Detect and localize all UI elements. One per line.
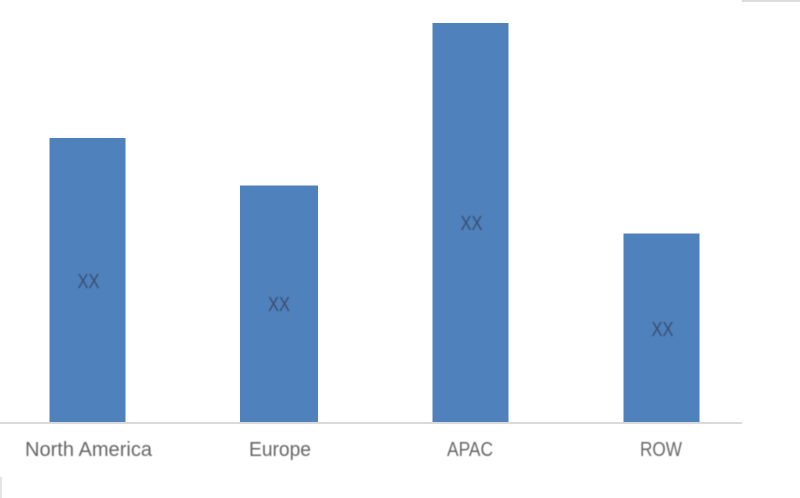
x axis line: [0, 422, 742, 424]
axis label: Europe: Europe: [249, 439, 311, 461]
axis label: North America: North America: [25, 439, 153, 461]
axis label: ROW: ROW: [640, 439, 682, 461]
bar: APAC: [432, 23, 508, 422]
bar: Europe: [240, 186, 318, 422]
bar: North America: [50, 138, 126, 422]
bar: ROW: [624, 234, 700, 422]
bar: Europe: XX: [268, 294, 290, 316]
bar: APAC: XX: [460, 213, 482, 235]
axis label: APAC: APAC: [447, 439, 493, 461]
bar: ROW: XX: [652, 319, 674, 341]
bar: North America: XX: [78, 271, 100, 293]
